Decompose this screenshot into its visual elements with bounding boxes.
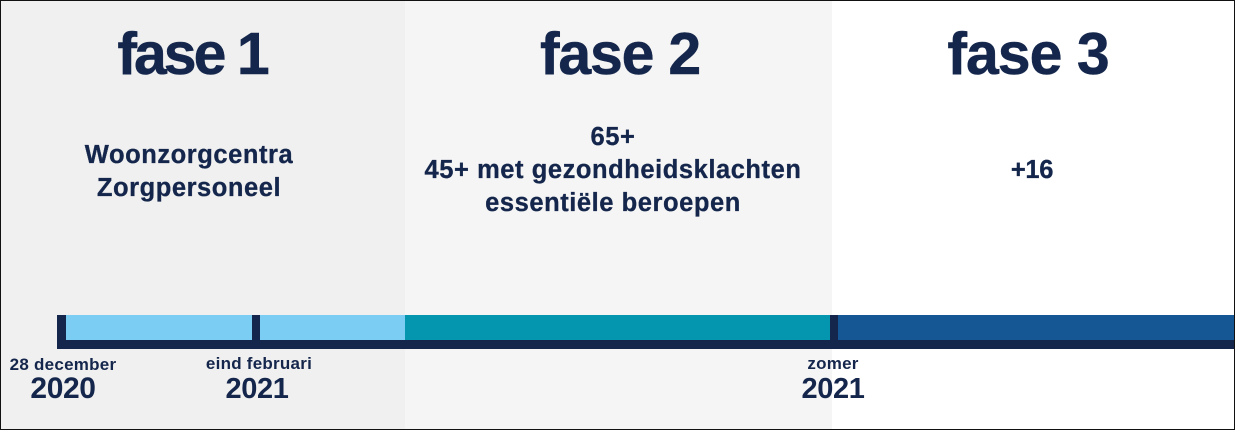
date label: eind februari: eind februari — [206, 354, 312, 373]
text: fase 2 target groups: 45+ met gezondheidsklachten — [425, 156, 801, 184]
text: fase 2 target groups — [424, 123, 801, 217]
heading: fase 3: fase 3 — [947, 21, 1109, 87]
panel: fase 1 background — [0, 0, 405, 430]
timeline bar — [57, 315, 1235, 349]
year label: 2021 zomer: 2021 — [802, 373, 864, 405]
panel: fase 3 background — [832, 0, 1235, 430]
heading: fase 2: fase 2 — [540, 21, 700, 87]
text: fase 1 target groups: Zorgpersoneel — [97, 174, 281, 202]
panel: fase 2 background — [405, 0, 832, 430]
segment: fase 1 second part — [260, 315, 405, 340]
date label: 28 december: 28 december — [10, 355, 116, 374]
segment: fase 3 — [838, 315, 1235, 340]
text: fase 1 target groups — [84, 141, 293, 202]
segment: fase 1 first part — [66, 315, 252, 340]
text: fase 1 target groups: Woonzorgcentra — [85, 141, 293, 169]
heading: fase 1: fase 1 — [117, 21, 267, 87]
date label: zomer: zomer — [807, 354, 859, 373]
year label: 2021: 2021 — [226, 373, 288, 405]
year label: 2020: 2020 — [30, 372, 96, 405]
text: fase 2 target groups: 65+ — [591, 123, 635, 151]
text: fase 3 target group: +16 — [1011, 156, 1053, 184]
text: fase 2 target groups: essentiële beroepen — [485, 189, 741, 217]
segment: fase 2 — [405, 315, 830, 340]
